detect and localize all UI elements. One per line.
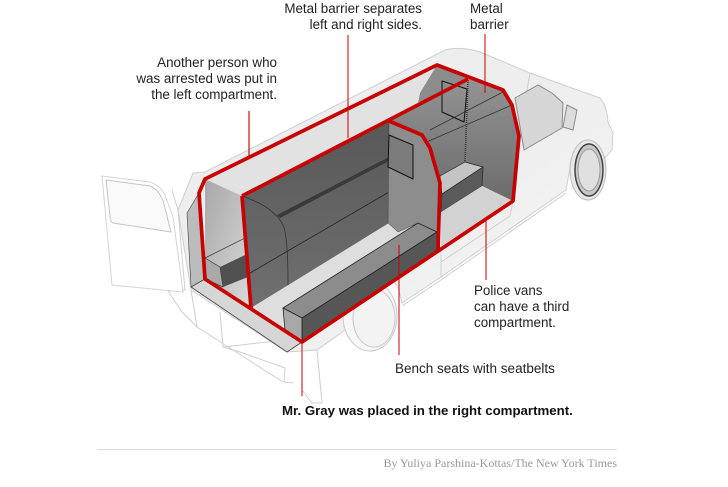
right bench [283,223,437,342]
label: metal barrier: Metal [470,1,503,16]
van body outline [168,48,613,403]
label: right compartment: Mr. Gray was placed in the right compartment. [282,403,573,418]
label: left compartment: the left compartment. [151,87,277,102]
red compartment outlines [199,65,519,342]
left compartment interior [205,179,251,308]
compartment cutaway [187,65,519,352]
left wall of left compartment [187,193,205,287]
divider window [388,135,413,179]
label: metal barrier: barrier [470,17,509,32]
metal barrier between left and right [242,121,389,308]
icon: front wheel [570,140,606,200]
floor of right compartment [251,223,437,342]
front bench [440,162,483,212]
icon: side mirror [563,105,577,130]
footer rule [97,449,617,450]
barrier seam [465,80,468,162]
icon: side window [515,85,563,150]
front compartment wall [465,79,519,201]
left bench [205,217,287,287]
label: metal barrier separates: Metal barrier separates [284,1,422,16]
front floor [441,186,513,246]
partition top above barrier [418,65,468,104]
icon: rear wheel [343,281,397,351]
label: third compartment: Police vans [474,283,543,298]
byline: By Yuliya Parshina-Kottas/The New York Times [383,456,617,470]
icon: open rear door [102,176,183,292]
label: metal barrier separates: left and right sides. [310,17,422,32]
back window [442,81,467,122]
label: third compartment: compartment. [474,315,556,330]
leader lines [249,34,486,396]
wall rails [415,92,512,147]
third compartment divider [388,121,440,251]
middle compartment wall [389,79,468,200]
roof panel [205,65,468,196]
label: left compartment: was arrested was put in [135,71,277,86]
label: left compartment: Another person who [157,55,277,70]
label: third compartment: can have a third [474,299,569,314]
floor panel [191,279,302,352]
label: bench seats: Bench seats with seatbelts [395,361,555,376]
